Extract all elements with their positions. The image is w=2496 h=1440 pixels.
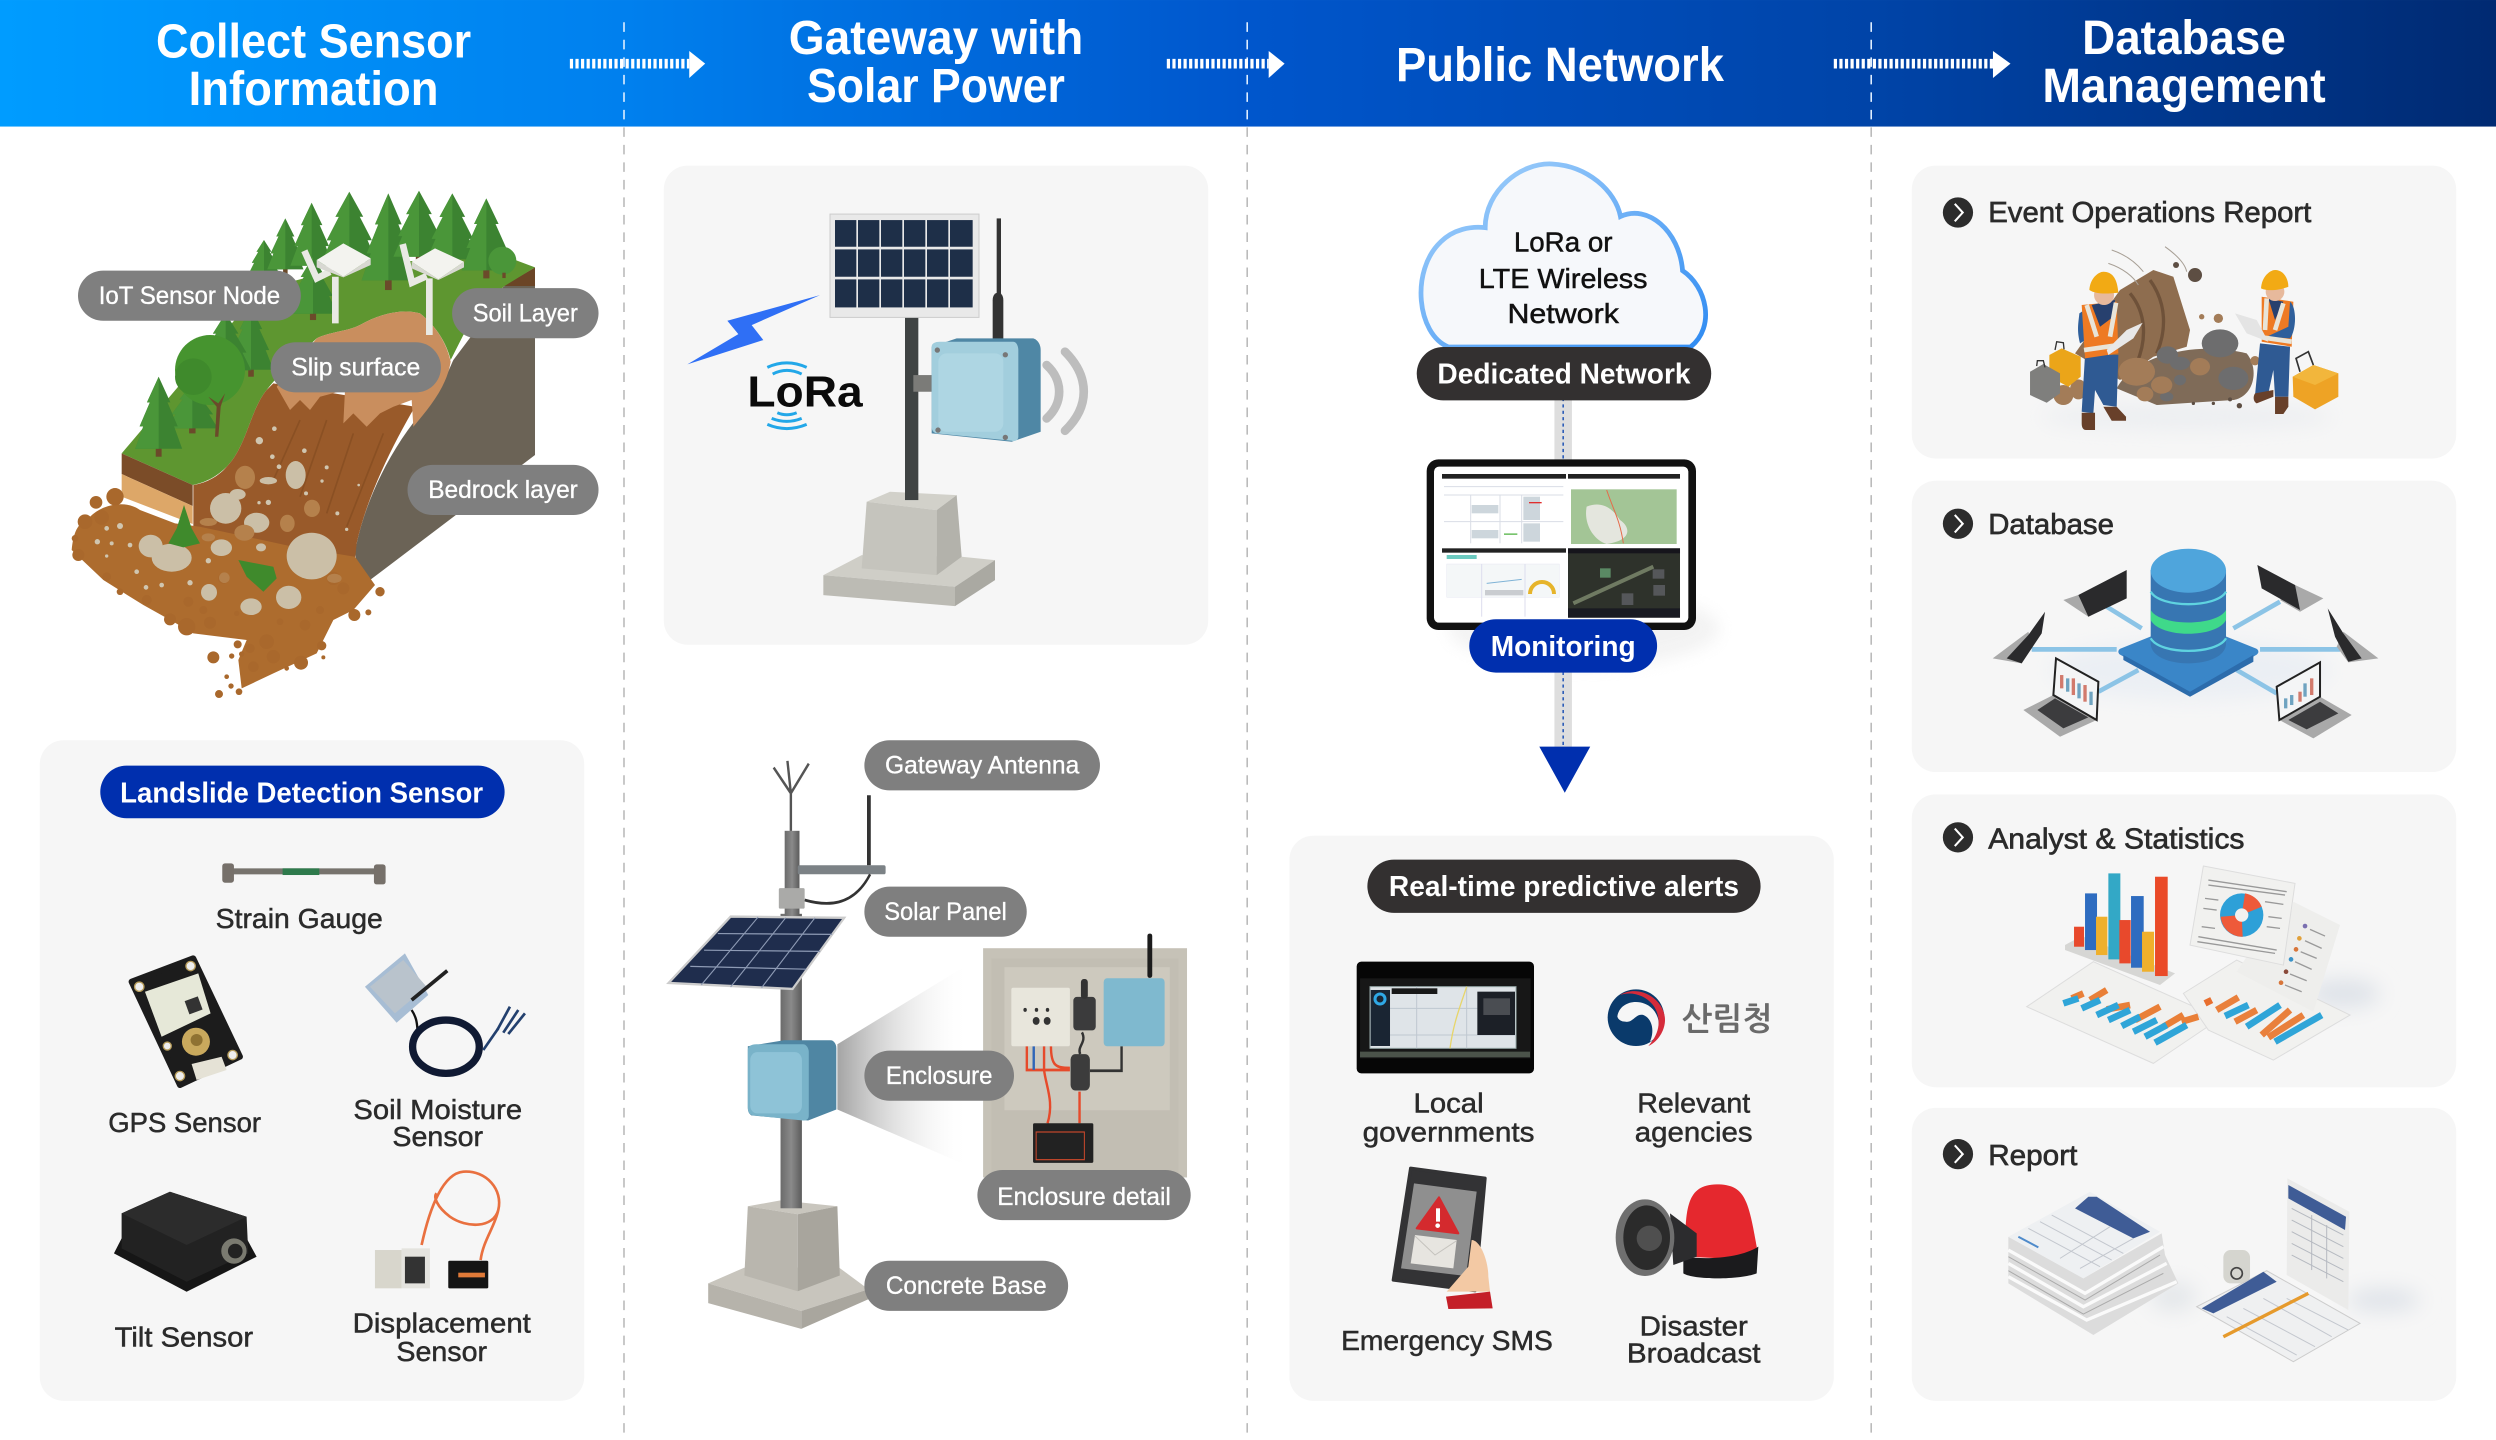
text: LoRa or LTE wireless network: LTE Wireless bbox=[1479, 263, 1648, 294]
text: displacement sensor bbox=[353, 1307, 531, 1367]
label: IoT Sensor Node: IoT Sensor Node bbox=[99, 283, 280, 310]
label: Bedrock layer bbox=[408, 465, 599, 515]
panel: database bbox=[1912, 481, 2456, 772]
heading: database: Database bbox=[1988, 509, 2114, 541]
label: enclosure detail bbox=[977, 1170, 1191, 1220]
panel: analyst and statistics bbox=[1912, 794, 2456, 1087]
heading: event operations report: Event Operations Report bbox=[1988, 197, 2311, 229]
heading: report: Report bbox=[1988, 1140, 2077, 1172]
bars: floor chart left bbox=[2063, 990, 2198, 1043]
panel: event operations report bbox=[1912, 166, 2456, 458]
illustration: stacked reports bbox=[2008, 1178, 2420, 1362]
illustration: charts and reports bbox=[2027, 866, 2380, 1063]
label: gateway antenna bbox=[864, 740, 1100, 790]
pill: monitoring: Monitoring bbox=[1491, 631, 1636, 663]
icon: LoRa logo: LoRa bbox=[747, 368, 863, 417]
text: tilt sensor: Tilt Sensor bbox=[115, 1322, 253, 1353]
heading: public network: Public Network bbox=[1396, 39, 1724, 92]
icon: enclosure on pole bbox=[748, 1040, 836, 1121]
text: emergency SMS: Emergency SMS bbox=[1341, 1325, 1553, 1356]
text: disaster broadcast: Disaster bbox=[1640, 1311, 1748, 1342]
pill heading: landslide detection sensor: Landslide Detection Sensor bbox=[120, 777, 483, 809]
icon: signal arcs bbox=[1047, 352, 1084, 431]
bullet icon bbox=[1943, 1139, 1973, 1169]
icon: upright report sheet bbox=[2287, 1178, 2349, 1310]
icon: enclosure box bbox=[913, 338, 1041, 442]
pill: dedicated network bbox=[1417, 347, 1711, 400]
arrow: collect to gateway bbox=[570, 51, 705, 78]
pill heading: landslide detection sensor bbox=[100, 766, 505, 818]
logo: Korea Forest Service bbox=[1608, 989, 1665, 1046]
icon: cloud network bbox=[1421, 164, 1706, 347]
label: solar panel bbox=[864, 887, 1027, 937]
icons: laptops bbox=[1993, 565, 2378, 738]
heading: analyst and statistics: Analyst & Statistics bbox=[1988, 823, 2244, 855]
icon: pole with antennas bbox=[774, 761, 886, 1208]
label: concrete base bbox=[864, 1261, 1068, 1311]
icon: equipment cases bbox=[2030, 342, 2338, 409]
bars: floor chart right bbox=[2205, 997, 2322, 1042]
label: Soil Layer: Soil Layer bbox=[473, 301, 578, 328]
icon: emergency SMS phone bbox=[1393, 1168, 1493, 1309]
text: displacement sensor: Sensor bbox=[396, 1336, 487, 1367]
text: LoRa or LTE wireless network bbox=[1479, 227, 1648, 329]
icon: disaster broadcast siren bbox=[1616, 1184, 1758, 1278]
arrow: network to database bbox=[1834, 51, 2010, 78]
icon: mug bbox=[2223, 1250, 2250, 1283]
text: korean agency name: 산림청 bbox=[1682, 1001, 1773, 1037]
heading line: solar power: Solar Power bbox=[807, 60, 1065, 113]
icon: antenna bbox=[993, 218, 1003, 342]
icon: worker left bbox=[2078, 272, 2143, 430]
panel: real-time predictive alerts bbox=[1289, 836, 1834, 1401]
text: local governments: Local bbox=[1414, 1088, 1484, 1119]
text: LoRa or LTE wireless network: LoRa or bbox=[1514, 227, 1613, 258]
icon: strain gauge bbox=[222, 863, 386, 884]
label: IoT Sensor Node bbox=[78, 271, 301, 321]
icon: GPS sensor bbox=[132, 958, 240, 1085]
text: relevant agencies bbox=[1635, 1088, 1753, 1147]
illustration: enclosure detail bbox=[983, 934, 1187, 1177]
pill heading: real-time predictive alerts bbox=[1367, 860, 1761, 913]
label: Slip surface bbox=[271, 342, 441, 392]
icon: worker right bbox=[2235, 270, 2295, 414]
panel: landslide detection sensor bbox=[40, 740, 584, 1401]
header band bbox=[0, 0, 2496, 127]
heading: database: Database bbox=[2082, 12, 2286, 65]
pill: monitoring bbox=[1469, 619, 1657, 673]
illustration: landslide cross-section bbox=[72, 191, 599, 698]
icon: tilted solar panel bbox=[669, 917, 844, 989]
text: local governments bbox=[1363, 1088, 1535, 1147]
connector: vertical link with arrow bbox=[1539, 398, 1590, 793]
label: gateway antenna: Gateway Antenna bbox=[885, 753, 1080, 780]
bullet icon bbox=[1943, 509, 1973, 539]
label: Soil Layer bbox=[452, 288, 599, 338]
pill heading: real-time predictive alerts: Real-time predictive alerts bbox=[1389, 871, 1739, 903]
icon: pole bbox=[905, 316, 918, 500]
label: concrete base: Concrete Base bbox=[886, 1273, 1047, 1300]
heading line: management: Management bbox=[2042, 60, 2326, 113]
icon: paper stack bbox=[2008, 1192, 2178, 1335]
heading: gateway with solar power: Gateway with bbox=[789, 12, 1083, 65]
icon: displacement sensor bbox=[375, 1172, 499, 1288]
panel: report bbox=[1912, 1108, 2456, 1401]
text: strain gauge: Strain Gauge bbox=[216, 903, 383, 934]
label: Slip surface: Slip surface bbox=[291, 355, 420, 382]
illustration: field workers at rockfall bbox=[2030, 247, 2338, 430]
text: LoRa or LTE wireless network: Network bbox=[1507, 298, 1619, 329]
heading: collect sensor information: Collect Sensor bbox=[156, 15, 471, 68]
illustration: central database and laptops bbox=[1993, 549, 2378, 738]
sensor icons group bbox=[114, 863, 525, 1292]
icon: solar panel bbox=[830, 214, 979, 317]
text: relevant agencies: Relevant bbox=[1637, 1088, 1750, 1119]
panel: LoRa gateway bbox=[664, 166, 1208, 645]
icon: floor report with pencil bbox=[2197, 1271, 2360, 1362]
text: local governments: governments bbox=[1363, 1116, 1535, 1147]
bullet icon bbox=[1943, 197, 1973, 228]
text: soil moisture sensor bbox=[353, 1094, 522, 1152]
label: enclosure detail: Enclosure detail bbox=[997, 1184, 1171, 1211]
label: enclosure bbox=[864, 1051, 1014, 1101]
text: disaster broadcast bbox=[1627, 1311, 1761, 1369]
text: relevant agencies: agencies bbox=[1635, 1116, 1753, 1147]
text: displacement sensor: Displacement bbox=[353, 1307, 531, 1338]
label: Bedrock layer: Bedrock layer bbox=[428, 477, 578, 504]
heading line: information: Information bbox=[189, 63, 439, 116]
label: enclosure: Enclosure bbox=[886, 1063, 993, 1090]
icon: soil moisture sensor bbox=[365, 953, 525, 1073]
text: GPS sensor: GPS Sensor bbox=[108, 1107, 261, 1138]
arrow: gateway to network bbox=[1167, 51, 1285, 78]
icon: concrete base bbox=[823, 492, 995, 606]
icon: local government tablet bbox=[1357, 962, 1534, 1073]
icon: tilt sensor bbox=[114, 1192, 257, 1292]
text: soil moisture sensor: Soil Moisture bbox=[353, 1094, 522, 1125]
label: solar panel: Solar Panel bbox=[884, 899, 1007, 926]
text: disaster broadcast: Broadcast bbox=[1627, 1338, 1761, 1369]
tablet: monitoring dashboard bbox=[1427, 459, 1719, 667]
text: soil moisture sensor: Sensor bbox=[392, 1121, 483, 1152]
illustration: gateway assembly bbox=[669, 740, 1191, 1329]
pill: dedicated network: Dedicated Network bbox=[1437, 359, 1691, 391]
icon: concrete base block bbox=[708, 1200, 868, 1329]
bullet icon bbox=[1943, 822, 1973, 852]
icon: lightning bolt bbox=[687, 295, 820, 364]
sheet: pie chart report bbox=[2190, 866, 2295, 965]
sheet: side report bbox=[2237, 902, 2340, 1012]
